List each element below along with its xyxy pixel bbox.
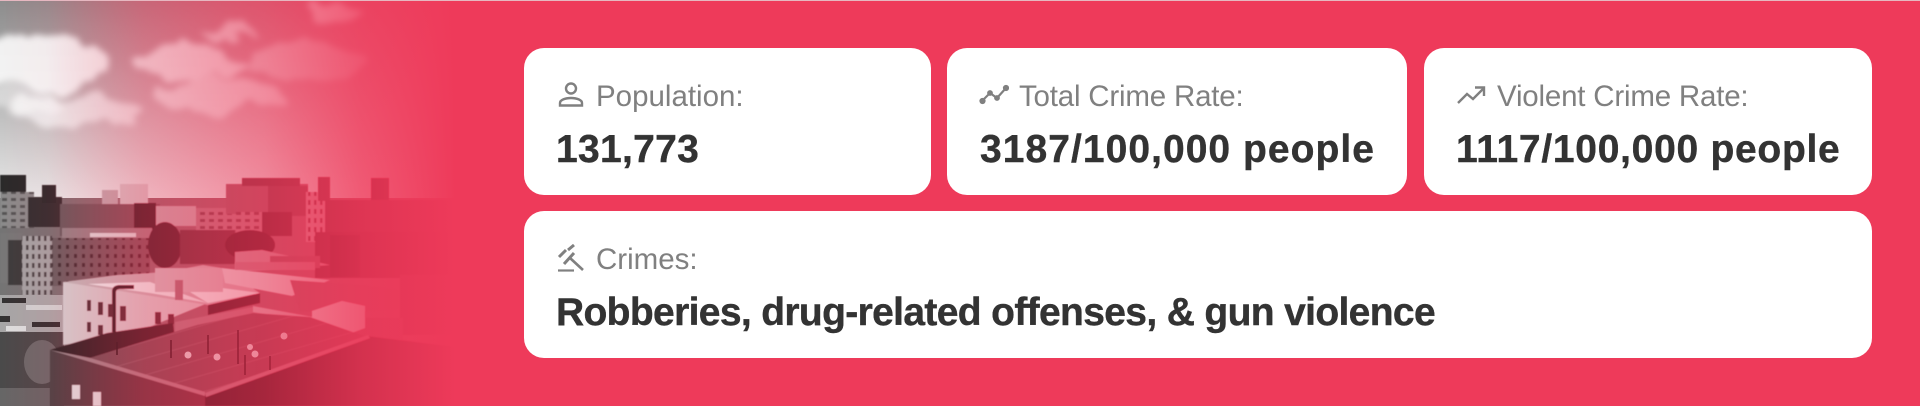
panel: total crime rate	[947, 48, 1407, 195]
panel: population	[524, 48, 931, 195]
gradient overlay	[0, 0, 480, 406]
top edge highlight	[0, 0, 1920, 1]
value: population: 131,773	[556, 128, 699, 171]
label: total crime rate: Total Crime Rate:	[1019, 80, 1243, 113]
value: violent crime rate: 1117/100,000 people	[1456, 128, 1840, 171]
red colour tint	[0, 0, 480, 406]
panel: violent crime rate	[1424, 48, 1872, 195]
icon: person	[558, 82, 584, 107]
icon: line chart	[979, 84, 1009, 104]
main roof	[90, 313, 367, 393]
icon: gavel	[558, 244, 584, 272]
photo: city skyline with red gradient	[0, 1, 432, 406]
label: violent crime rate: Violent Crime Rate:	[1497, 80, 1748, 113]
icon: trending up arrow	[1457, 86, 1486, 104]
label: crimes: Crimes:	[596, 243, 698, 276]
value: total crime rate: 3187/100,000 people	[980, 128, 1375, 171]
label: population: Population:	[596, 80, 744, 113]
background buildings	[0, 175, 480, 302]
value: crimes: Robberies, drug-related offenses, & gun violence	[556, 291, 1435, 334]
white roof building	[50, 262, 480, 406]
parking lot	[0, 295, 64, 335]
clouds	[0, 2, 370, 128]
panel: crimes	[524, 211, 1872, 358]
